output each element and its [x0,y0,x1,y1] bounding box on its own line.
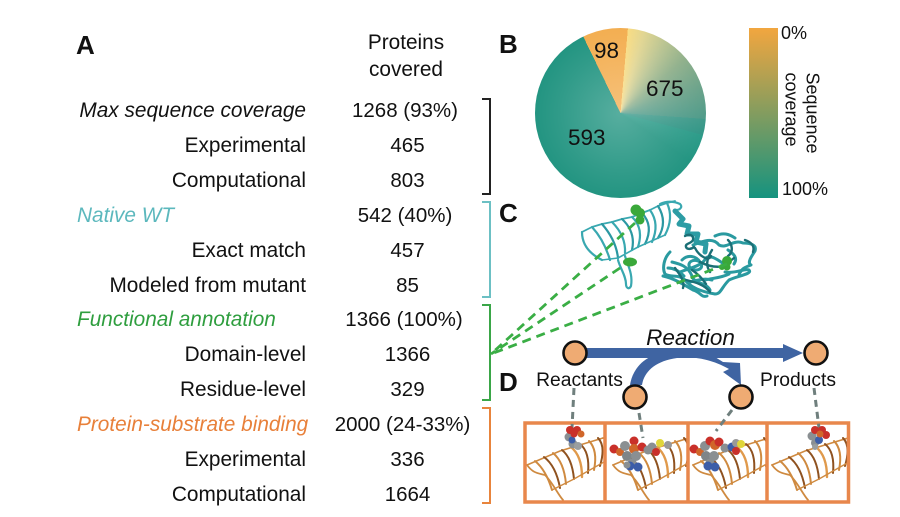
row: max sequence coverage: Max sequence coverage [79,99,306,122]
dashed green leader lines [491,223,727,354]
pie chart: sequence coverage [535,28,706,198]
colour scale title [782,72,822,154]
intermediate node 2 [730,386,752,408]
protein structure: teal ribbon model [582,201,755,296]
molecule: substrate in frame 1 [564,426,584,450]
panel label D: D [499,367,518,397]
reaction label: Reaction [646,325,735,350]
value: residue-level: 329 [390,378,425,401]
row: experimental: Experimental [185,134,306,157]
pie value 98: 98 [594,38,619,63]
pie value 593: 593 [568,125,606,150]
orange ribbon structures in frames [527,438,858,500]
panel label B: B [499,29,518,59]
reactant node [564,342,586,364]
value: domain-level: 1366 [385,343,430,366]
colour scale title: coverage [782,72,802,147]
colour scale title: Sequence [802,72,822,154]
value: max sequence coverage: 1268 (93%) [352,99,458,122]
value: computational: 803 [390,169,425,192]
colour scale bar [749,28,778,198]
panel label C: C [499,198,518,228]
molecule: substrate in frame 3 [690,436,745,472]
column heading: proteins covered: covered [369,58,443,81]
value: experimental: 465 [390,134,425,157]
molecule: substrate in frame 2 [610,436,672,472]
value: exact match: 457 [390,239,425,262]
row: modeled from mutant: Modeled from mutant [109,274,306,297]
reaction arrow [585,344,803,385]
row: computational: Computational [172,169,306,192]
row: exact match: Exact match [192,239,306,262]
value: experimental binding: 336 [390,448,425,471]
products label: Products [760,370,836,391]
bracket: max sequence coverage [482,99,490,194]
brackets, protein structures and reaction diagram [482,98,850,504]
value: modeled from mutant: 85 [396,274,419,297]
molecule: substrate in frame 4 [808,426,830,450]
dashed grey leader lines [572,388,819,438]
intermediate node 1 [624,386,646,408]
colour scale label 0%: 0% [781,23,807,43]
reactants label: Reactants [536,370,623,391]
row: functional annotation: Functional annotation [77,308,276,331]
row: residue-level: Residue-level [180,378,306,401]
row: computational binding: Computational [172,483,306,506]
row: native WT: Native WT [77,204,174,227]
icon: green residue spheres [623,204,732,270]
row: protein-substrate binding: Protein-substrate binding [77,413,308,436]
value: protein-substrate binding: 2000 (24-33%) [335,413,470,436]
panel label A: A [76,30,95,60]
product node [804,342,828,364]
bracket: functional annotation [482,305,490,400]
value: functional annotation: 1366 (100%) [345,308,463,331]
pie value 675: 675 [646,76,684,101]
column heading: proteins covered: Proteins [368,31,444,54]
bracket: native WT [482,202,490,297]
row: domain-level: Domain-level [185,343,306,366]
bracket: protein-substrate binding [482,408,490,503]
value: native WT: 542 (40%) [358,204,452,227]
orange frame strip [525,423,848,502]
colour scale label 100%: 100% [782,179,828,199]
row: experimental binding: Experimental [185,448,306,471]
column heading: proteins covered [368,31,444,81]
value: computational binding: 1664 [385,483,430,506]
